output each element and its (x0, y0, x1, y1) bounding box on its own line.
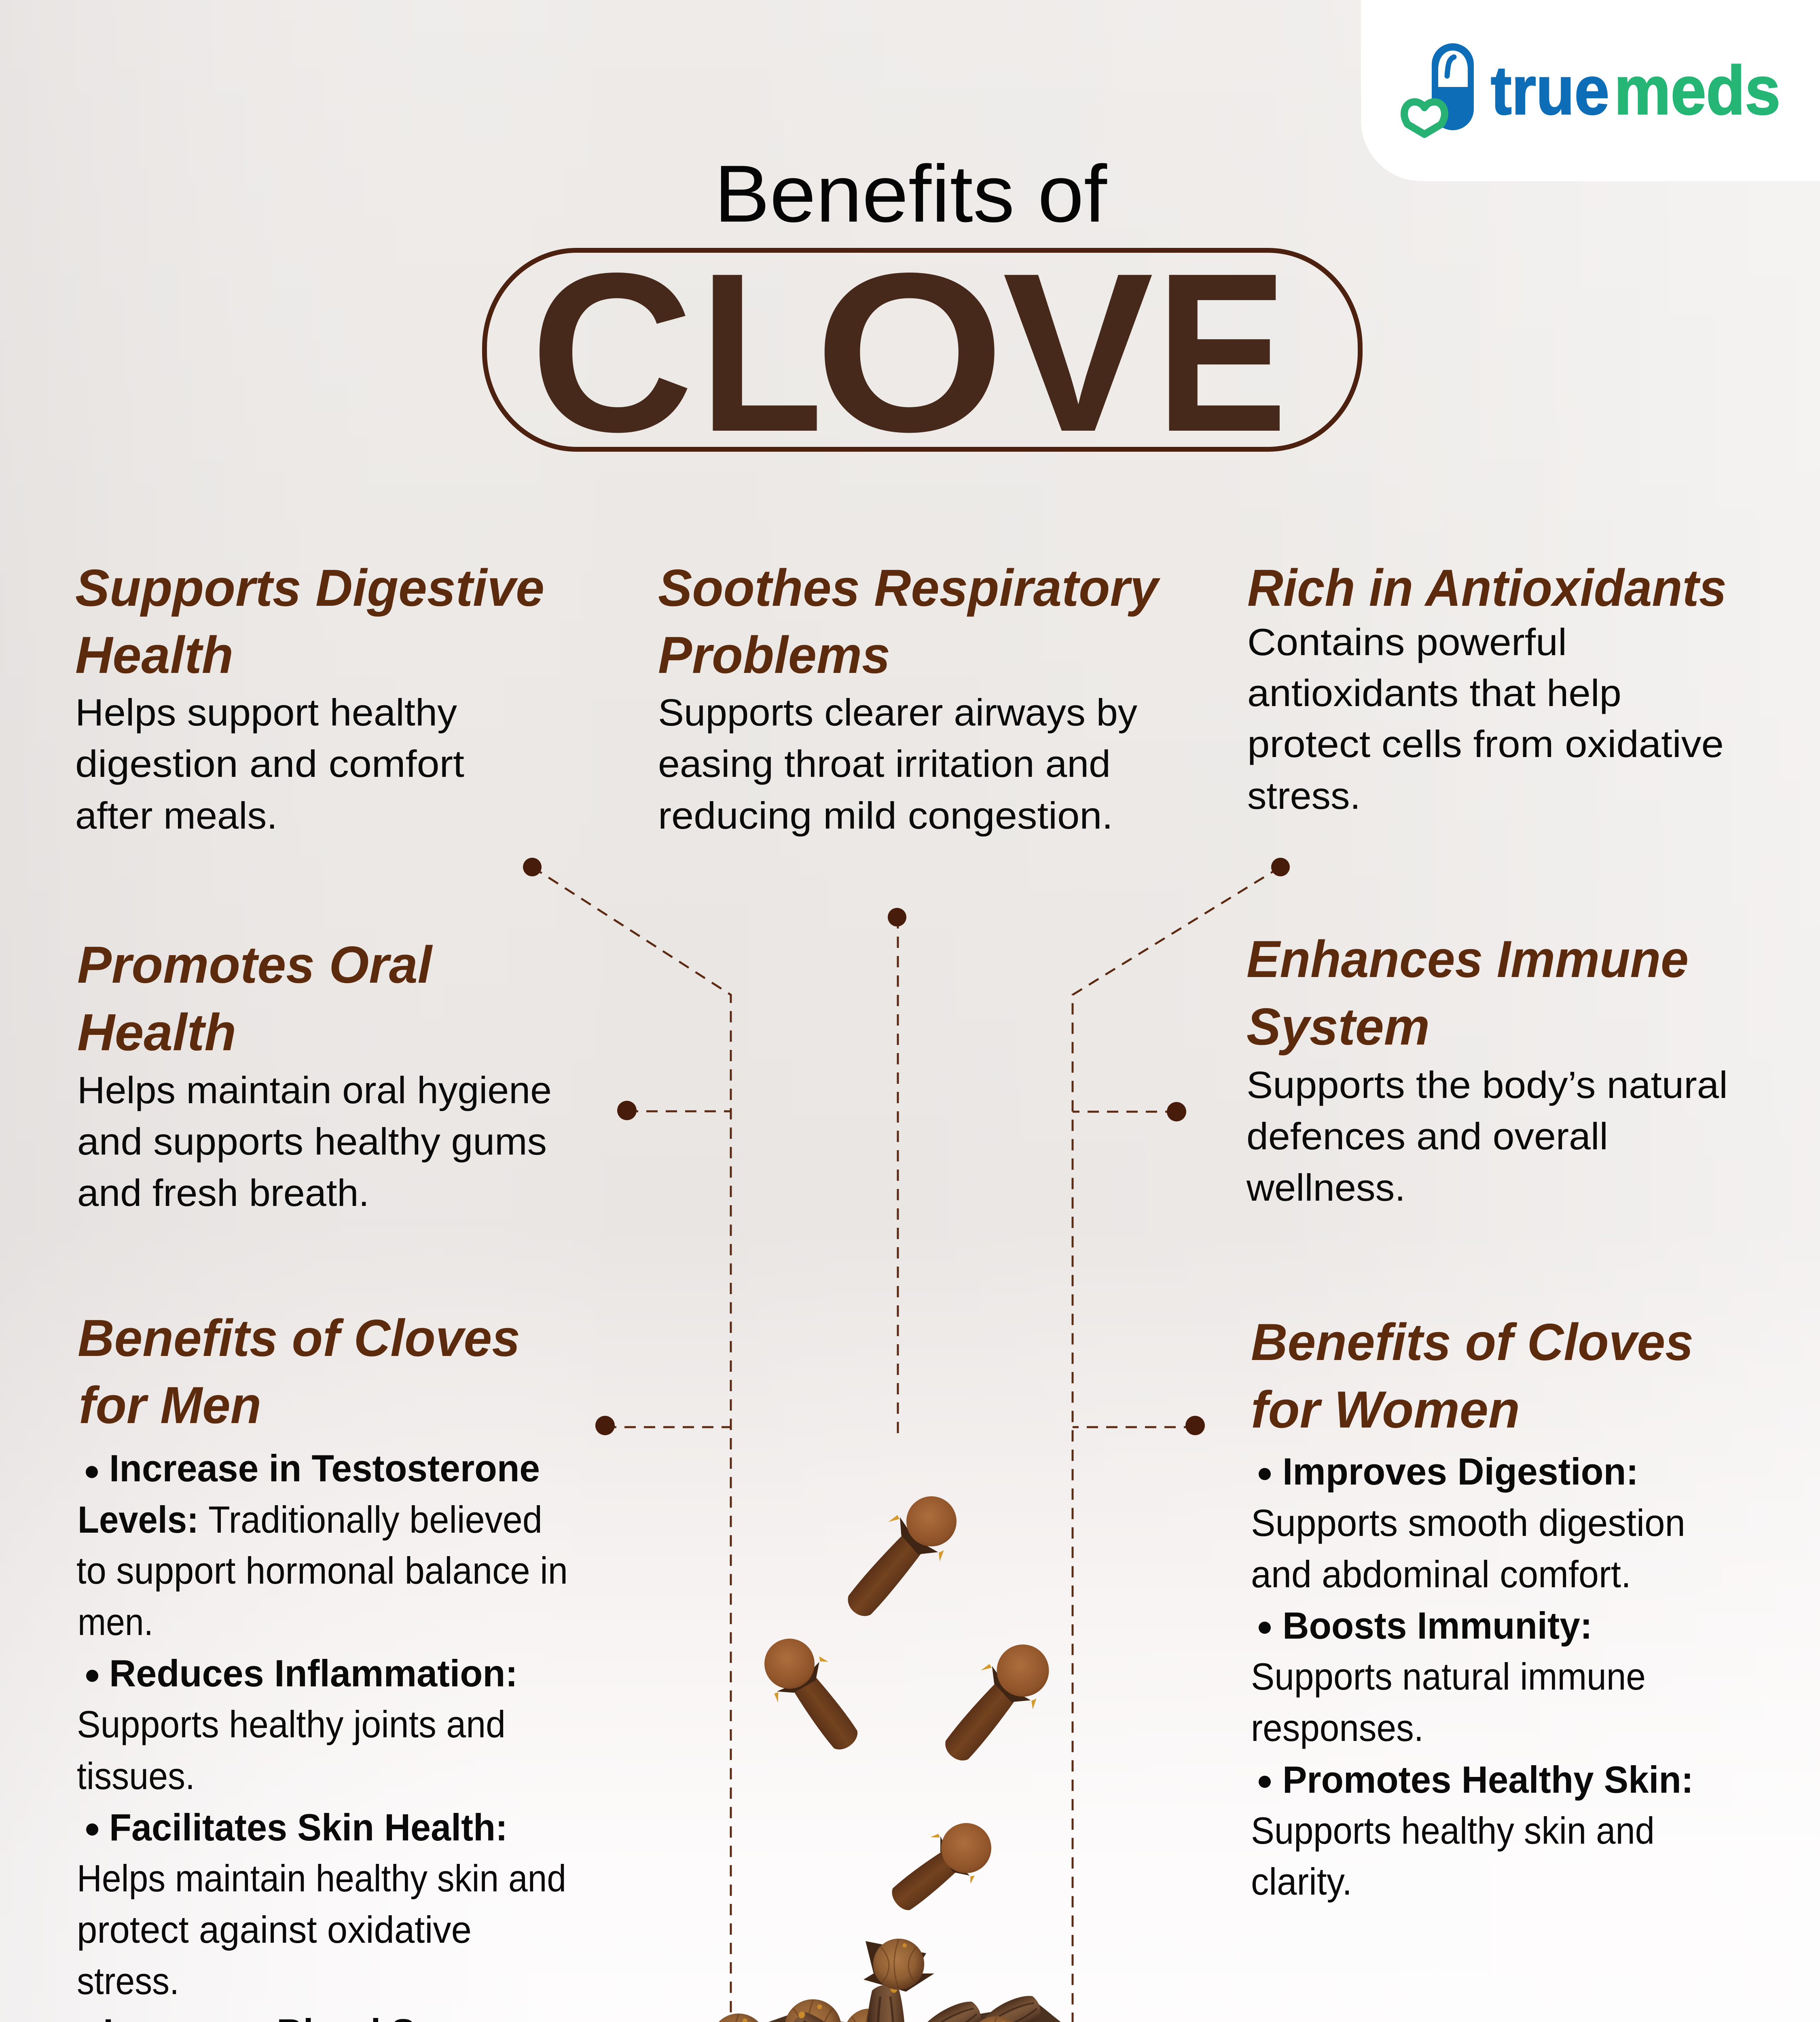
logo wordmark (1491, 52, 1780, 129)
panel: supports digestive health: Helps support healthy (75, 691, 457, 734)
panel: enhances immune system: wellness. (1246, 1166, 1405, 1209)
panel: benefits of cloves for women: responses. (1251, 1707, 1424, 1749)
panel: benefits of cloves for women: Supports natural immune (1251, 1655, 1646, 1698)
panel: soothes respiratory problems: Supports clearer airways by (658, 691, 1137, 734)
standing clove on top of pile (863, 1939, 934, 2022)
panel: supports digestive health: after meals. (75, 794, 277, 837)
panel: promotes oral health (77, 936, 552, 1214)
panel: benefits of cloves for women: Boosts Immunity: (1282, 1604, 1592, 1647)
panel: rich in antioxidants: protect cells from oxidative (1247, 723, 1724, 765)
logo panel (1361, 0, 1820, 181)
title pill: CLOVE: O (815, 226, 1005, 479)
falling cloves (764, 1496, 1049, 1927)
panel: supports digestive health: Health (75, 626, 233, 684)
panel: benefits of cloves for men: tissues. (77, 1755, 195, 1797)
panel: benefits of cloves for men: for Men (79, 1376, 261, 1434)
panel: benefits of cloves for women: Improves Digestion: (1282, 1450, 1638, 1493)
panel: benefits of cloves for men: Increase in Testosterone (109, 1447, 540, 1489)
panel: promotes oral health: and fresh breath. (77, 1172, 369, 1214)
panel: benefits of cloves for women: Supports smooth digestion (1251, 1502, 1685, 1544)
panel: benefits of cloves for men: protect against oxidative (77, 1908, 472, 1951)
panel: supports digestive health (75, 559, 544, 837)
panel: benefits of cloves for women: Benefits of Cloves (1251, 1313, 1693, 1371)
panel: benefits of cloves for men: Facilitates Skin Health: (109, 1806, 508, 1849)
panel: benefits of cloves for men: Helps maintain healthy skin and (77, 1857, 566, 1899)
bowl of cloves (718, 1939, 1061, 2022)
panel: benefits of cloves for women (1251, 1313, 1693, 1903)
panel: promotes oral health: Health (77, 1003, 236, 1062)
panel: benefits of cloves for men: Supports healthy joints and (77, 1703, 506, 1745)
panel: promotes oral health: Helps maintain oral hygiene (77, 1069, 552, 1111)
panel: rich in antioxidants: Rich in Antioxidants (1247, 559, 1727, 617)
panel: rich in antioxidants: antioxidants that help (1247, 672, 1621, 714)
panel: benefits of cloves for men: Levels: (78, 1498, 199, 1541)
panel: rich in antioxidants: stress. (1247, 774, 1361, 817)
panel: benefits of cloves for men: stress. (77, 1960, 179, 2002)
panel: benefits of cloves for women: Promotes Healthy Skin: (1282, 1758, 1693, 1801)
title pill: CLOVE: E (1156, 226, 1287, 479)
panel: benefits of cloves for men: Traditionally believed (208, 1498, 542, 1541)
panel: enhances immune system: Enhances Immune (1246, 930, 1689, 988)
logo wordmark: true (1491, 52, 1609, 129)
logo wordmark: meds (1614, 52, 1780, 129)
panel: benefits of cloves for men (76, 1309, 568, 2022)
title pill: CLOVE: L (699, 226, 823, 479)
panel: supports digestive health: Supports Digestive (75, 559, 544, 617)
panel: enhances immune system (1246, 930, 1728, 1209)
panel: soothes respiratory problems (658, 559, 1161, 837)
connector lines (532, 867, 1280, 2022)
title pill: CLOVE (485, 226, 1360, 479)
panel: enhances immune system: Supports the body’s natural (1246, 1064, 1728, 1106)
panel: enhances immune system: System (1246, 998, 1430, 1056)
panel: benefits of cloves for men: to support hormonal balance in (76, 1549, 568, 1592)
panel: benefits of cloves for men: men. (78, 1601, 153, 1643)
panel: soothes respiratory problems: Soothes Respiratory (658, 559, 1161, 617)
icon: capsule and heart (1404, 43, 1474, 134)
clove pile mound (525, 2004, 1299, 2022)
panel: supports digestive health: digestion and comfort (75, 742, 464, 785)
connector dots (523, 858, 1290, 1435)
panel: benefits of cloves for women: clarity. (1251, 1860, 1352, 1903)
panel: benefits of cloves for women: Supports healthy skin and (1251, 1809, 1655, 1852)
panel: promotes oral health: Promotes Oral (77, 936, 433, 994)
panel: rich in antioxidants: Contains powerful (1247, 621, 1567, 663)
panel: rich in antioxidants (1247, 559, 1727, 817)
panel: soothes respiratory problems: Problems (658, 626, 890, 684)
panel: benefits of cloves for men: Benefits of Cloves (78, 1309, 520, 1367)
clove pile stems and heads (547, 1990, 1285, 2022)
panel: benefits of cloves for women: for Women (1251, 1381, 1520, 1439)
panel: promotes oral health: and supports healthy gums (77, 1120, 547, 1163)
panel: benefits of cloves for men: Reduces Inflammation: (109, 1652, 518, 1694)
title pill: CLOVE: C (530, 226, 694, 479)
panel: benefits of cloves for women: and abdominal comfort. (1251, 1553, 1631, 1595)
panel: enhances immune system: defences and overall (1246, 1115, 1608, 1157)
panel: soothes respiratory problems: easing throat irritation and (658, 742, 1111, 785)
panel: soothes respiratory problems: reducing mild congestion. (658, 794, 1113, 837)
title: Benefits of: Benefits of (714, 149, 1107, 239)
title pill: CLOVE: V (1003, 226, 1155, 479)
